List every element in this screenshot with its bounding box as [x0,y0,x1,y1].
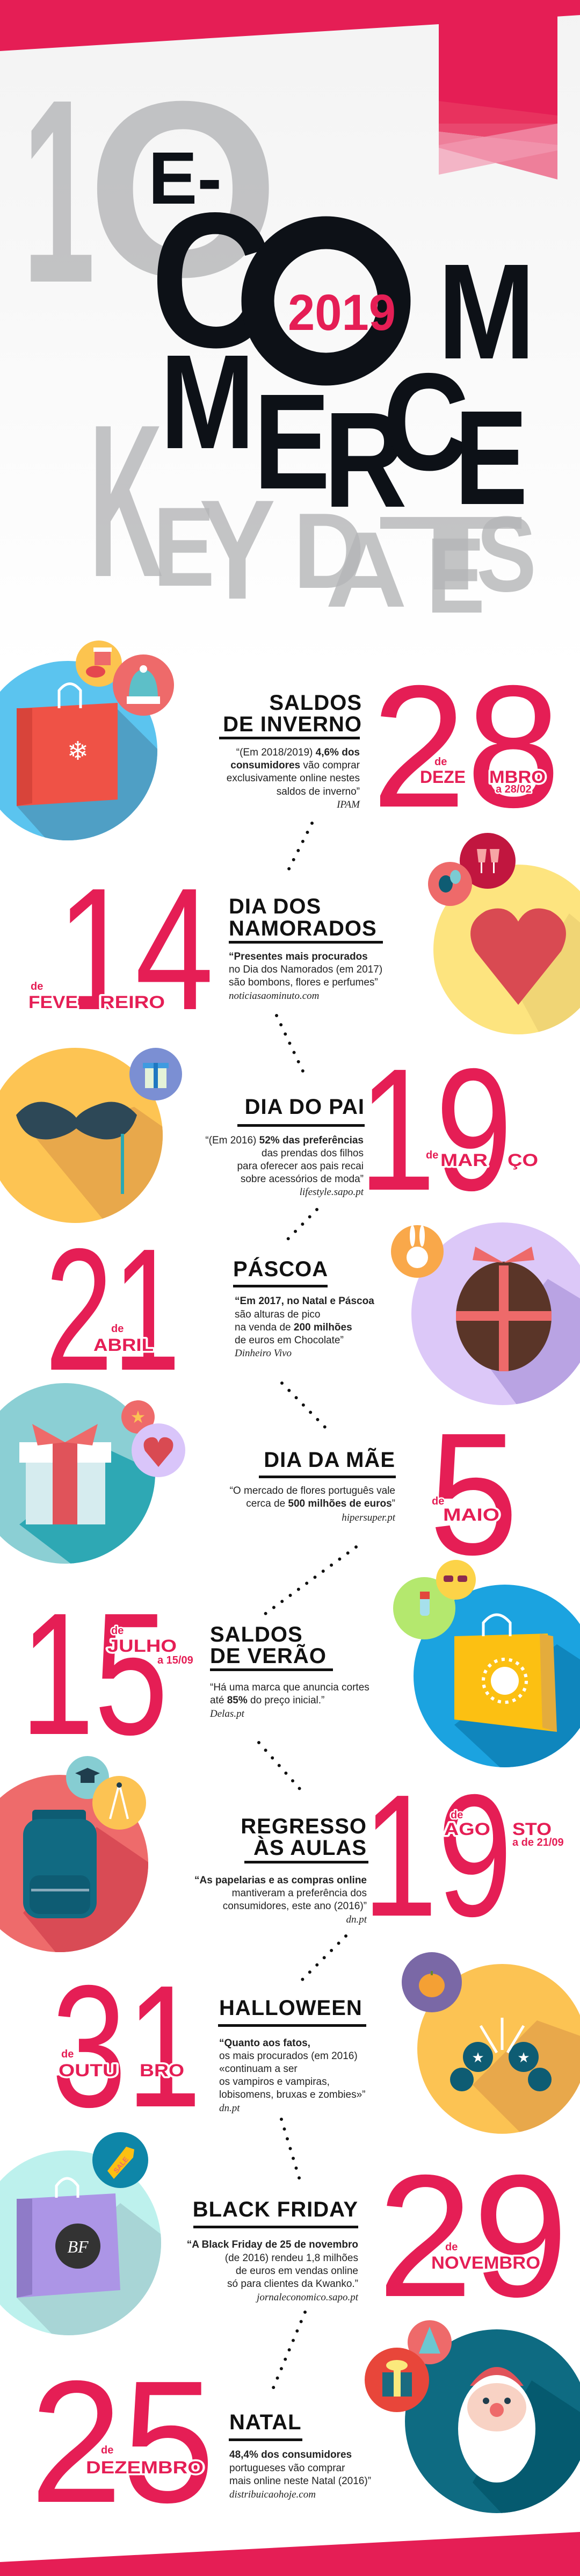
date: 31 outubro: OUTU [59,2061,118,2080]
icon: purple bag circle [0,2150,161,2335]
quote: só para clientes da Kwanko.” [227,2278,358,2290]
quote: «continuam a ser [219,2063,298,2075]
panel: dia do pai [0,1048,537,1223]
icon: backpack circle [0,1775,148,1952]
title: KEY DATES: Y [199,470,276,629]
header: pink ribbon [439,15,557,179]
quote: saldos de inverno” [277,786,360,797]
icon: star: ★ [130,1407,146,1427]
date: 21 abril: 21 [45,1212,180,1407]
title: E-COMMERCE: C [383,344,469,499]
date: 29 novembro: 29 [378,2139,568,2333]
date: 29 novembro: NOVEMBRO [431,2253,540,2272]
title: E-COMMERCE: M [438,235,535,387]
date: 19 agosto: STO [512,1819,552,1839]
title: 10: 1 [23,45,95,337]
panel: natal: distribuicaohoje.com [229,2489,316,2500]
icon: fireworks circle: ★ [472,2050,484,2066]
quote: os mais procurados (em 2016) [219,2050,358,2062]
title: E-COMMERCE: C [150,172,273,387]
date: 14 fevereiro: de [31,981,43,992]
date: 31 outubro: BRO [140,2061,184,2080]
panel: dia dos namorados: noticiasaominuto.com [229,990,319,1002]
panel: saldos de verao: Delas.pt [209,1708,245,1719]
icon: gift [129,1048,182,1100]
date: 28 dezembro: MBRO [489,767,546,787]
date: 21 abril: ABRIL [93,1335,154,1355]
date: 5 maio: de [432,1495,444,1507]
icon: yellow bag circle [414,1585,580,1767]
icon: egg circle [411,1222,580,1405]
icon: gift [365,2348,429,2412]
icon: hat [113,654,174,716]
icon: compass [92,1776,146,1830]
icon: fireworks circle [417,1964,580,2134]
icon: santa circle [405,2329,580,2513]
panel: regresso as aulas [0,1756,563,1952]
icon: christmas tree [408,2320,452,2364]
title: DE VERÃO [210,1643,327,1668]
panel: black friday: jornaleconomico.sapo.pt [255,2292,359,2303]
icon: balloons [428,862,472,906]
quote: (de 2016) rendeu 1,8 milhões [225,2253,358,2264]
icon: sale tag: SALE [112,2155,130,2175]
quote: exclusivamente online nestes [227,773,360,784]
date: 28 dezembro: de [434,756,447,768]
panel: pascoa [51,1222,580,1405]
panel: halloween [57,1952,580,2134]
title: DE INVERNO [223,713,362,736]
quote: até 85% do preço inicial.” [210,1695,324,1706]
title: KEY DATES: K [89,379,163,622]
title: 10: O [87,49,279,329]
icon: wine glasses [460,833,516,889]
title: KEY DATES: E [153,484,215,610]
icon: pumpkin [402,1952,462,2012]
date: 15 julho: a 15/09 [157,1654,193,1666]
quote: “Em 2017, no Natal e Páscoa [235,1296,374,1307]
date: 15 julho: JULHO [107,1636,177,1656]
date: 28 dezembro: a 28/02 [496,783,532,795]
title: DIA DO PAI [245,1095,365,1119]
quote: portugueses vão comprar [229,2463,345,2474]
icon: gift circle [0,1383,155,1564]
quote: os vampiros e vampiras, [219,2076,330,2088]
panel: saldos de inverno [0,641,553,840]
quote: consumidores, este ano (2016)” [223,1901,367,1912]
date: 15 julho: de [111,1625,124,1637]
date: 14 fevereiro: REIRO [100,992,165,1012]
quote: 48,4% dos consumidores [229,2449,352,2460]
date: 5 maio: 5 [429,1397,518,1591]
date: 19 março: ÇO [508,1150,538,1170]
icon: moustache circle [0,1048,163,1223]
date: 21 abril: de [111,1323,124,1335]
date: 25 dezembro: DEZEMBRO [86,2458,204,2477]
title: DIA DOS [229,895,321,918]
date: 25 dezembro: de [101,2444,113,2456]
date: 19 março: de [426,1149,438,1161]
date: 19 agosto: a de 21/09 [512,1837,564,1848]
icon: heart circle [433,865,580,1034]
date: 25 dezembro: 25 [30,2344,215,2539]
quote: para oferecer aos pais recai [237,1161,364,1172]
date: 31 outubro: 31 [52,1949,201,2143]
icon: sunglasses [436,1560,476,1600]
date: 28 dezembro: DEZE [420,767,466,787]
panel: dia da mae [0,1383,511,1564]
quote: mantiveram a preferência dos [232,1888,367,1899]
title: E-COMMERCE: E [253,365,330,517]
quote: “Presentes mais procurados [229,951,368,962]
title: NATAL [229,2410,302,2434]
title: SALDOS [210,1623,303,1646]
icon: ice cream [393,1577,455,1639]
title: KEY DATES [89,379,536,636]
quote: são bombons, flores e perfumes” [229,977,378,988]
title: E-COMMERCE: M [160,327,255,477]
title: 2019: 2019 [288,284,396,341]
date: 19 março: MAR [440,1150,488,1170]
panel: saldos de verao [30,1560,580,1767]
quote: das prendas dos filhos [262,1148,364,1159]
quote: lobisomens, bruxas e zombies»” [219,2089,365,2100]
date: 19 agosto: AGO [444,1819,490,1839]
date: 31 outubro: de [61,2048,74,2060]
date: 29 novembro: de [445,2241,458,2253]
panel: dia dos namorados [30,833,580,1034]
title: E-COMMERCE: R [324,384,407,536]
panel: dia do pai: lifestyle.sapo.pt [300,1186,364,1198]
title: REGRESSO [241,1815,367,1838]
quote: consumidores vão comprar [230,760,360,771]
quote: “(Em 2018/2019) 4,6% dos [236,747,360,758]
header: pink band [0,0,580,51]
panel: black friday [0,2132,560,2335]
panel: natal [39,2320,580,2513]
icon: sock [76,641,122,687]
title: KEY DATES: T [378,494,524,612]
icon: star [121,1400,155,1434]
footer: pink band [0,2532,580,2576]
icon: heart [132,1423,185,1477]
panel: pascoa: Dinheiro Vivo [234,1348,292,1359]
quote: cerca de 500 milhões de euros” [246,1498,395,1509]
quote: no Dia dos Namorados (em 2017) [229,964,382,975]
quote: mais online neste Natal (2016)” [229,2476,371,2487]
title: PÁSCOA [233,1257,328,1281]
title: KEY DATES: E [426,516,485,636]
panel: regresso as aulas: dn.pt [346,1914,367,1925]
date: 14 fevereiro: FEVE [28,992,78,1012]
quote: sobre acessórios de moda” [241,1174,364,1185]
panel: halloween: dn.pt [219,2103,240,2114]
title: BLACK FRIDAY [193,2198,358,2221]
date: 19 agosto: de [451,1809,463,1821]
quote: de euros em vendas online [236,2265,358,2277]
quote: “Há uma marca que anuncia cortes [210,1682,369,1693]
title: E-COMMERCE [148,137,535,536]
title: ÀS AULAS [253,1836,367,1860]
quote: são alturas de pico [235,1309,320,1320]
icon: shopping bag circle [0,661,157,840]
icon: bunny [391,1225,444,1278]
icon: shopping bag circle: ❄ [67,736,89,766]
title: SALDOS [269,691,362,715]
quote: “(Em 2016) 52% das preferências [205,1135,364,1146]
quote: de euros em Chocolate” [235,1335,344,1346]
title: HALLOWEEN [219,1996,363,2020]
date: 15 julho: 15 [20,1577,168,1771]
quote: “A Black Friday de 25 de novembro [187,2239,358,2250]
panel: saldos de inverno: IPAM [336,799,360,810]
date: 19 agosto: 19 [363,1758,512,1953]
quote: “As papelarias e as compras online [194,1875,367,1886]
title: DIA DA MÃE [264,1447,395,1472]
title: KEY DATES: D [293,491,365,611]
title: KEY DATES: S [476,494,536,614]
title: E-COMMERCE: E [454,383,528,533]
title: NAMORADOS [229,917,377,940]
quote: na venda de 200 milhões [235,1322,352,1333]
title: E-COMMERCE: E- [148,137,222,220]
icon: fireworks circle: ★ [517,2050,530,2066]
icon: purple bag circle: BF [67,2237,89,2256]
dotted connector [287,823,312,873]
date: 19 março: 19 [359,1032,512,1227]
quote: “Quanto aos fatos, [219,2038,310,2049]
panel: dia da mae: hipersuper.pt [342,1512,396,1523]
title: KEY DATES: A [325,510,407,630]
quote: “O mercado de flores português vale [230,1485,395,1496]
icon: sale tag [92,2132,148,2188]
date: 28 dezembro: 28 [372,649,561,844]
icon: graduation cap [66,1756,109,1799]
date: 21 abril [45,1212,180,1407]
date: 5 maio: MAIO [443,1505,499,1524]
date: 14 fevereiro: 14 [56,852,214,1046]
